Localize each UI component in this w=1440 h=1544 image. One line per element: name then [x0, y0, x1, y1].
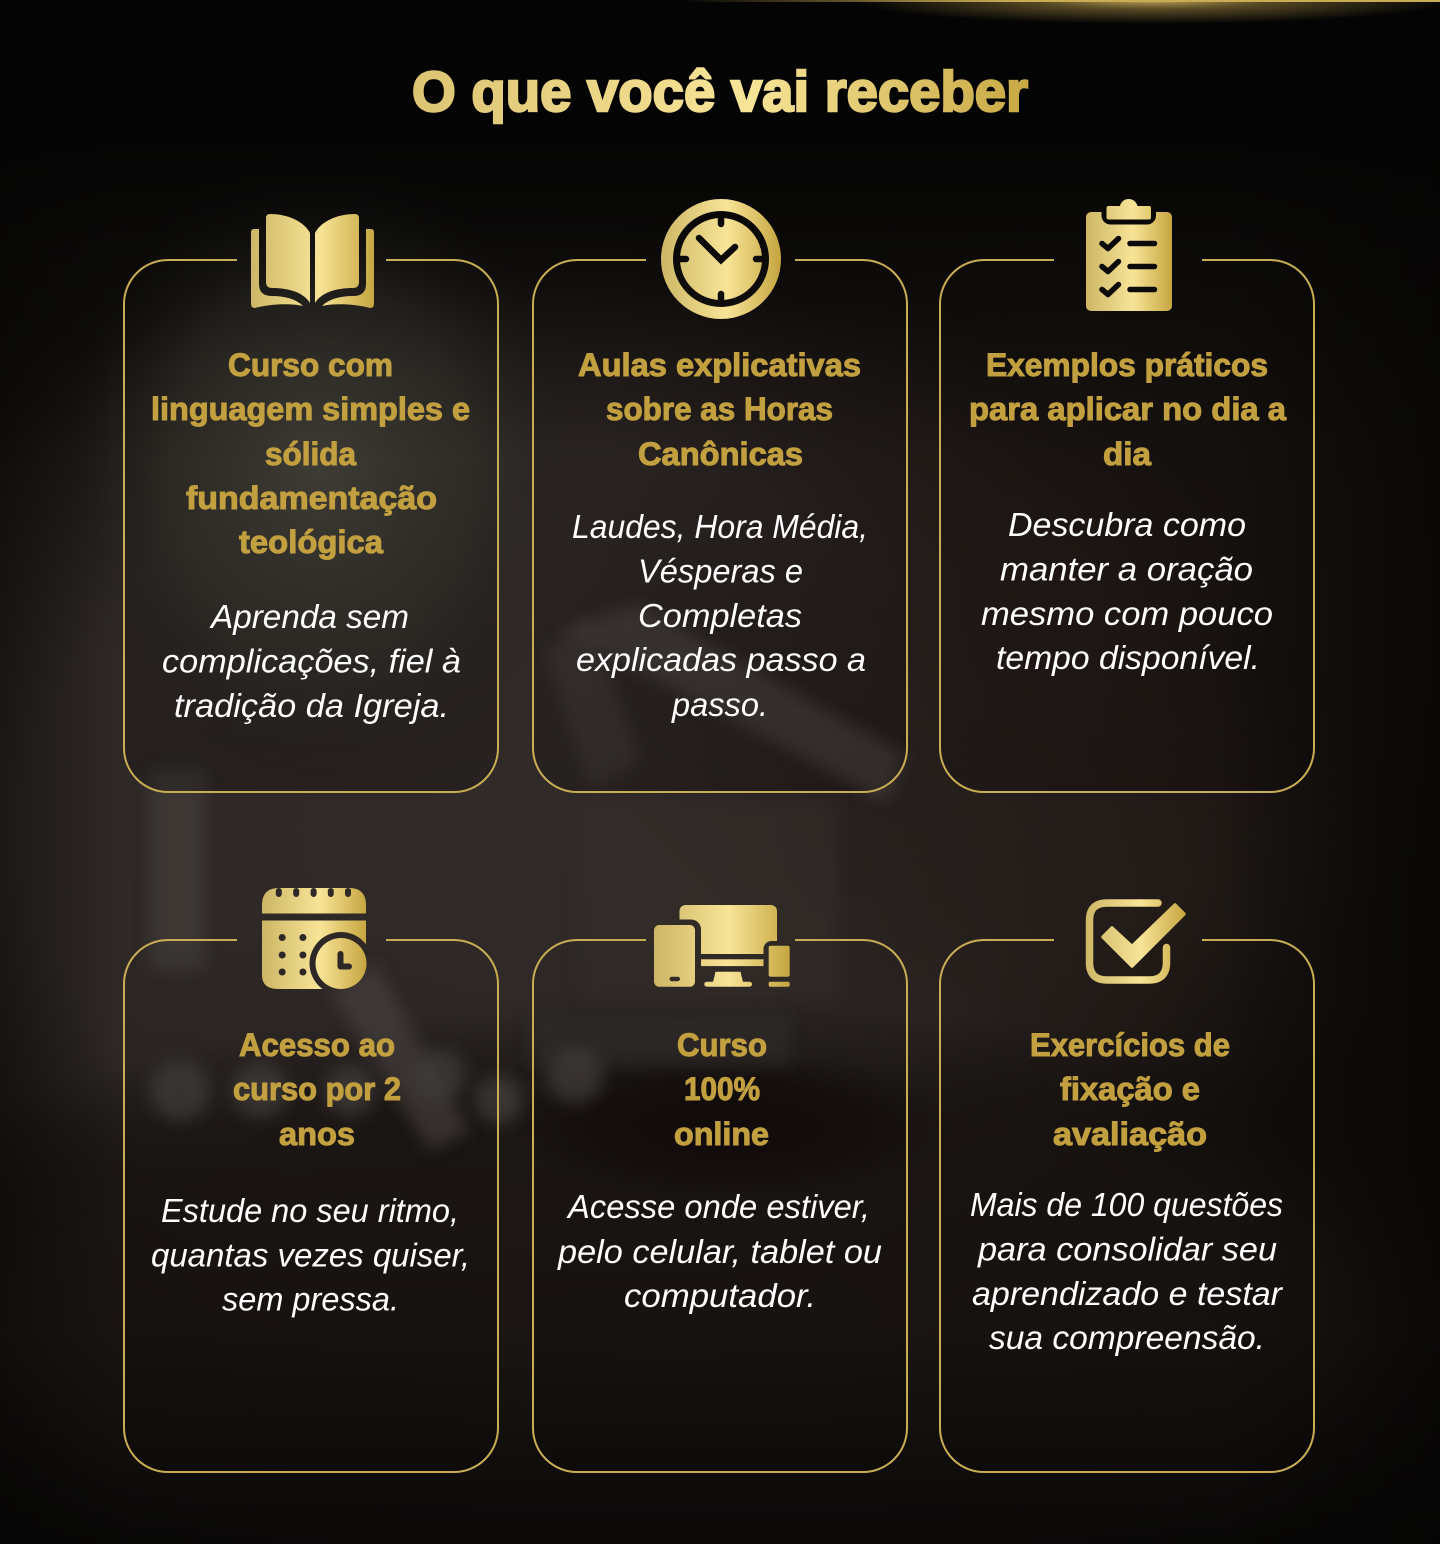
panel: exercícios de fixação: [940, 897, 1314, 1472]
heading: [578, 347, 861, 472]
body text: manter a oração: [1000, 550, 1253, 588]
body text: sem pressa.: [222, 1280, 399, 1318]
heading: linguagem simples e: [151, 391, 470, 427]
body text: Estude no seu ritmo,: [161, 1192, 459, 1229]
icon: clock: [659, 197, 783, 321]
body text: tempo disponível.: [996, 639, 1260, 676]
body text: Aprenda sem: [209, 598, 409, 635]
heading: 100%: [684, 1071, 760, 1107]
body text: Acesse onde estiver,: [566, 1188, 870, 1225]
heading: online: [674, 1116, 769, 1152]
icon: open book: [251, 214, 374, 308]
body text: Descubra como: [1008, 506, 1246, 543]
panel: curso 100% online: [533, 903, 907, 1472]
heading: [674, 1027, 769, 1152]
body text: [557, 1188, 882, 1314]
card frame: [533, 260, 907, 792]
body text: quantas vezes quiser,: [151, 1236, 470, 1274]
heading: Curso com: [228, 347, 393, 383]
heading: Exercícios de: [1030, 1027, 1230, 1063]
body text: passo.: [671, 686, 768, 723]
heading: dia: [1103, 436, 1151, 472]
heading: [233, 1027, 401, 1152]
body text: [981, 506, 1273, 676]
heading: Canônicas: [638, 436, 803, 472]
body text: complicações, fiel à: [162, 642, 461, 680]
body text: sua compreensão.: [989, 1319, 1265, 1356]
icon: check box: [1083, 897, 1188, 987]
body text: Completas: [638, 597, 802, 634]
card frame: [533, 940, 907, 1472]
card frame: [940, 940, 1314, 1472]
body text: Laudes, Hora Média,: [572, 508, 868, 545]
body text: computador.: [624, 1277, 816, 1314]
body text: [151, 1192, 470, 1318]
icon: calendar with clock: [262, 888, 366, 989]
heading: Aulas explicativas: [578, 347, 861, 383]
body text: tradição da Igreja.: [174, 687, 449, 724]
body text: explicadas passo a: [576, 641, 866, 678]
title: O que você vai receber: [412, 60, 1028, 124]
heading: teológica: [239, 524, 383, 560]
heading: para aplicar no dia a: [969, 391, 1286, 427]
icon: clipboard checklist: [1084, 197, 1174, 313]
body text: para consolidar seu: [977, 1230, 1277, 1268]
heading: fixação e: [1060, 1071, 1200, 1107]
heading: avaliação: [1053, 1116, 1207, 1152]
card frame: [124, 260, 498, 792]
heading: curso por 2: [233, 1071, 401, 1107]
panel: curso com linguagem simples: [124, 208, 498, 792]
heading: [969, 347, 1286, 472]
icon: devices: [652, 903, 792, 989]
heading: [151, 347, 470, 560]
panel: exemplos práticos: [940, 197, 1314, 792]
body text: [162, 598, 461, 724]
heading: anos: [279, 1116, 355, 1152]
card frame: [124, 940, 498, 1472]
heading: Exemplos práticos: [986, 347, 1268, 383]
body text: [572, 508, 868, 723]
body text: mesmo com pouco: [981, 595, 1273, 632]
panel: acesso por 2 anos: [124, 884, 498, 1472]
body text: Vésperas e: [638, 552, 803, 590]
body text: aprendizado e testar: [972, 1275, 1284, 1312]
card frame: [940, 260, 1314, 792]
body text: Mais de 100 questões: [970, 1186, 1283, 1223]
heading: sólida: [265, 436, 356, 472]
body text: [970, 1186, 1284, 1356]
panel: aulas explicativas: [533, 197, 907, 792]
top edge glow: [680, 0, 1440, 24]
heading: [1030, 1027, 1230, 1152]
body text: pelo celular, tablet ou: [557, 1233, 882, 1270]
heading: Curso: [677, 1027, 767, 1063]
heading: fundamentação: [186, 480, 437, 516]
heading: Acesso ao: [239, 1027, 395, 1063]
heading: sobre as Horas: [606, 391, 833, 427]
